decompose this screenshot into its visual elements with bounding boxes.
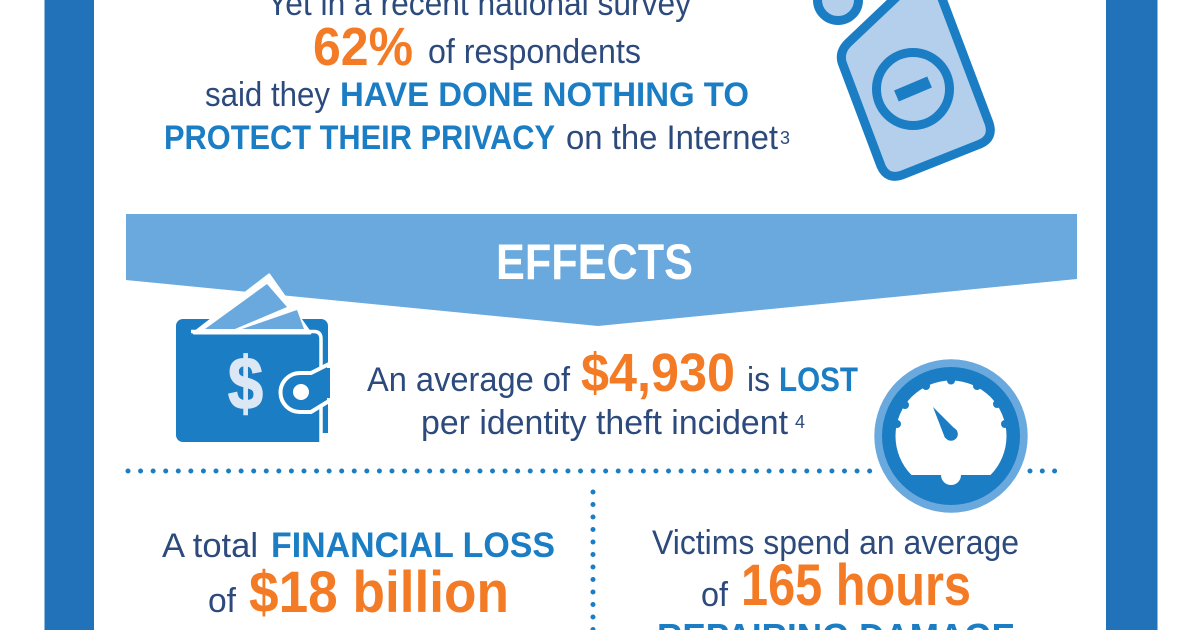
financial loss text: $18 billion	[249, 560, 509, 625]
average loss text: is	[747, 361, 770, 399]
survey text block	[164, 0, 790, 157]
average loss text: per identity theft incident	[421, 404, 789, 442]
hours spent text: 165 hours	[741, 553, 971, 618]
icon: privacy door hanger tag	[818, 0, 990, 176]
financial loss text: FINANCIAL LOSS	[271, 526, 555, 565]
average loss text: LOST	[779, 361, 858, 399]
survey text block: on the Internet	[566, 119, 779, 157]
survey text block: HAVE DONE NOTHING TO	[340, 76, 749, 114]
survey text block: PROTECT THEIR PRIVACY	[164, 119, 555, 157]
banner heading: EFFECTS	[496, 234, 693, 290]
financial loss text: A total	[162, 527, 258, 565]
survey text block: of respondents	[428, 33, 641, 71]
hours spent text	[652, 524, 1019, 630]
hours spent text: Victims spend an average	[652, 524, 1019, 562]
average loss text: 4	[795, 412, 805, 432]
icon: wallet: $	[228, 342, 263, 425]
left side bar	[44, 0, 94, 630]
icon: wallet	[176, 275, 330, 443]
financial loss text: of	[208, 582, 237, 620]
financial loss text	[162, 526, 555, 625]
right side bar	[1106, 0, 1158, 630]
icon: speedometer gauge	[874, 359, 1028, 513]
average loss text: $4,930	[581, 343, 735, 403]
survey text block: 62%	[313, 17, 413, 77]
survey text block: said they	[205, 76, 330, 114]
average loss text	[367, 343, 858, 442]
hours spent text: of	[701, 576, 729, 614]
average loss text: An average of	[367, 361, 571, 399]
effects banner	[126, 214, 1077, 326]
survey text block: 3	[780, 128, 790, 148]
